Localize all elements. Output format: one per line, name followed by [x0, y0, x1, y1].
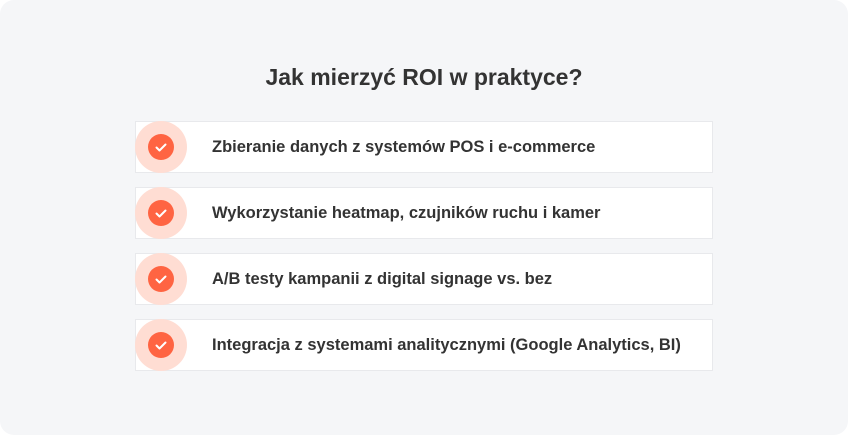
item 1 [135, 121, 713, 173]
icon: check [135, 253, 187, 305]
text: Wykorzystanie heatmap, czujników ruchu i kamer [212, 204, 600, 222]
item 4 [135, 319, 713, 371]
icon: check [135, 187, 187, 239]
item 2 [135, 187, 713, 239]
icon: check [135, 319, 187, 371]
text: A/B testy kampanii z digital signage vs. bez [212, 270, 552, 288]
item 3 [135, 253, 713, 305]
icon: check [135, 121, 187, 173]
text: Integracja z systemami analitycznymi (Google Analytics, BI) [212, 336, 681, 354]
title: Jak mierzyć ROI w praktyce? [265, 64, 583, 90]
text: Zbieranie danych z systemów POS i e-commerce [212, 138, 595, 156]
